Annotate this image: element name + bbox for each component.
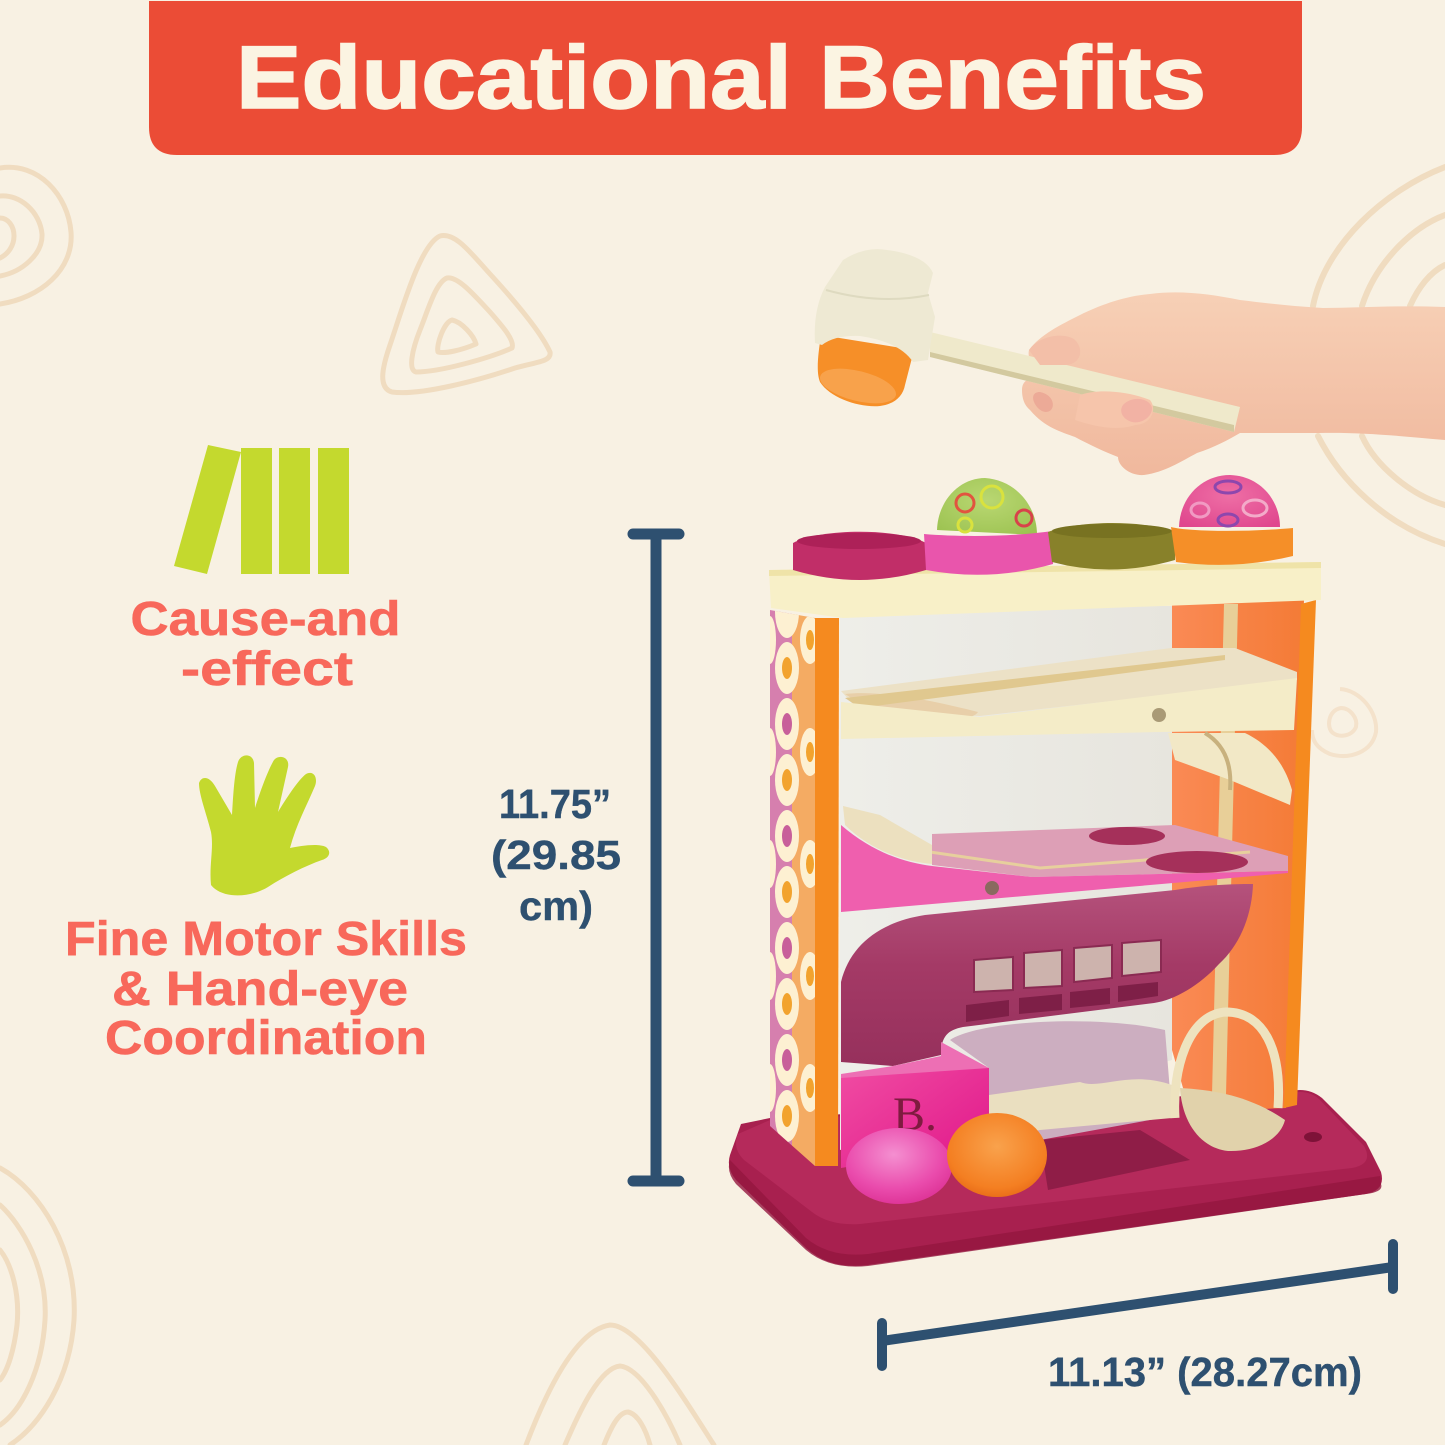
benefit: cause and effect <box>130 445 400 696</box>
decorative contour: top left <box>0 167 71 304</box>
logo: B. <box>893 1088 937 1141</box>
icon: books <box>174 445 349 574</box>
label: cause-and-effect: Cause-and <box>130 593 400 646</box>
orange right post <box>1284 600 1316 1108</box>
fingers over handle <box>1033 391 1153 428</box>
top pegs <box>793 523 1293 580</box>
mallet head <box>815 249 935 410</box>
ramp: upper cream <box>841 648 1297 805</box>
toy product <box>729 475 1382 1267</box>
patterned side panel <box>770 610 815 1166</box>
label: fine motor skills: & Hand-eye <box>112 963 408 1016</box>
width label: 11.13” (28.27cm) <box>1048 1349 1362 1395</box>
back panel <box>840 606 1172 1150</box>
hand <box>1022 292 1445 475</box>
benefit: fine motor skills <box>65 755 467 1065</box>
label: fine motor skills: Fine Motor Skills <box>65 913 467 966</box>
lower ramp and scoop <box>950 1012 1285 1190</box>
label: fine motor skills: Coordination <box>105 1012 427 1065</box>
height label: (29.85 <box>491 832 621 878</box>
decorative contour: right rings <box>1313 167 1445 544</box>
icon: hand <box>199 755 329 895</box>
decorative contour: bottom left <box>0 1168 74 1445</box>
title banner <box>149 1 1302 155</box>
toy base <box>729 1090 1382 1267</box>
height label: 11.75” <box>499 781 611 827</box>
decorative contour: triangle <box>383 235 550 393</box>
title: Educational Benefits <box>236 27 1206 127</box>
balls <box>846 1113 1047 1204</box>
width bracket <box>882 1244 1393 1366</box>
height dimension <box>491 534 679 1181</box>
pink block with logo <box>841 1042 989 1168</box>
ball: purple patterned <box>1179 475 1280 527</box>
mallet and hand <box>815 249 1445 475</box>
label: cause-and-effect: -effect <box>181 643 353 696</box>
ramp: purple tube <box>841 884 1253 1066</box>
decorative contour: small right ring <box>1312 689 1376 756</box>
back wall strut <box>1212 604 1238 1095</box>
thumb <box>1029 336 1080 365</box>
height label: cm) <box>519 883 593 929</box>
ball: green patterned <box>937 478 1037 535</box>
orange back wall <box>1172 600 1304 1112</box>
height bracket <box>633 534 679 1181</box>
mallet handle <box>930 332 1240 432</box>
orange front post <box>815 618 839 1166</box>
width dimension <box>882 1244 1393 1395</box>
ramp: middle pink <box>841 806 1288 912</box>
decorative contour: bottom centre <box>526 1325 714 1445</box>
top cream shelf <box>769 562 1321 618</box>
